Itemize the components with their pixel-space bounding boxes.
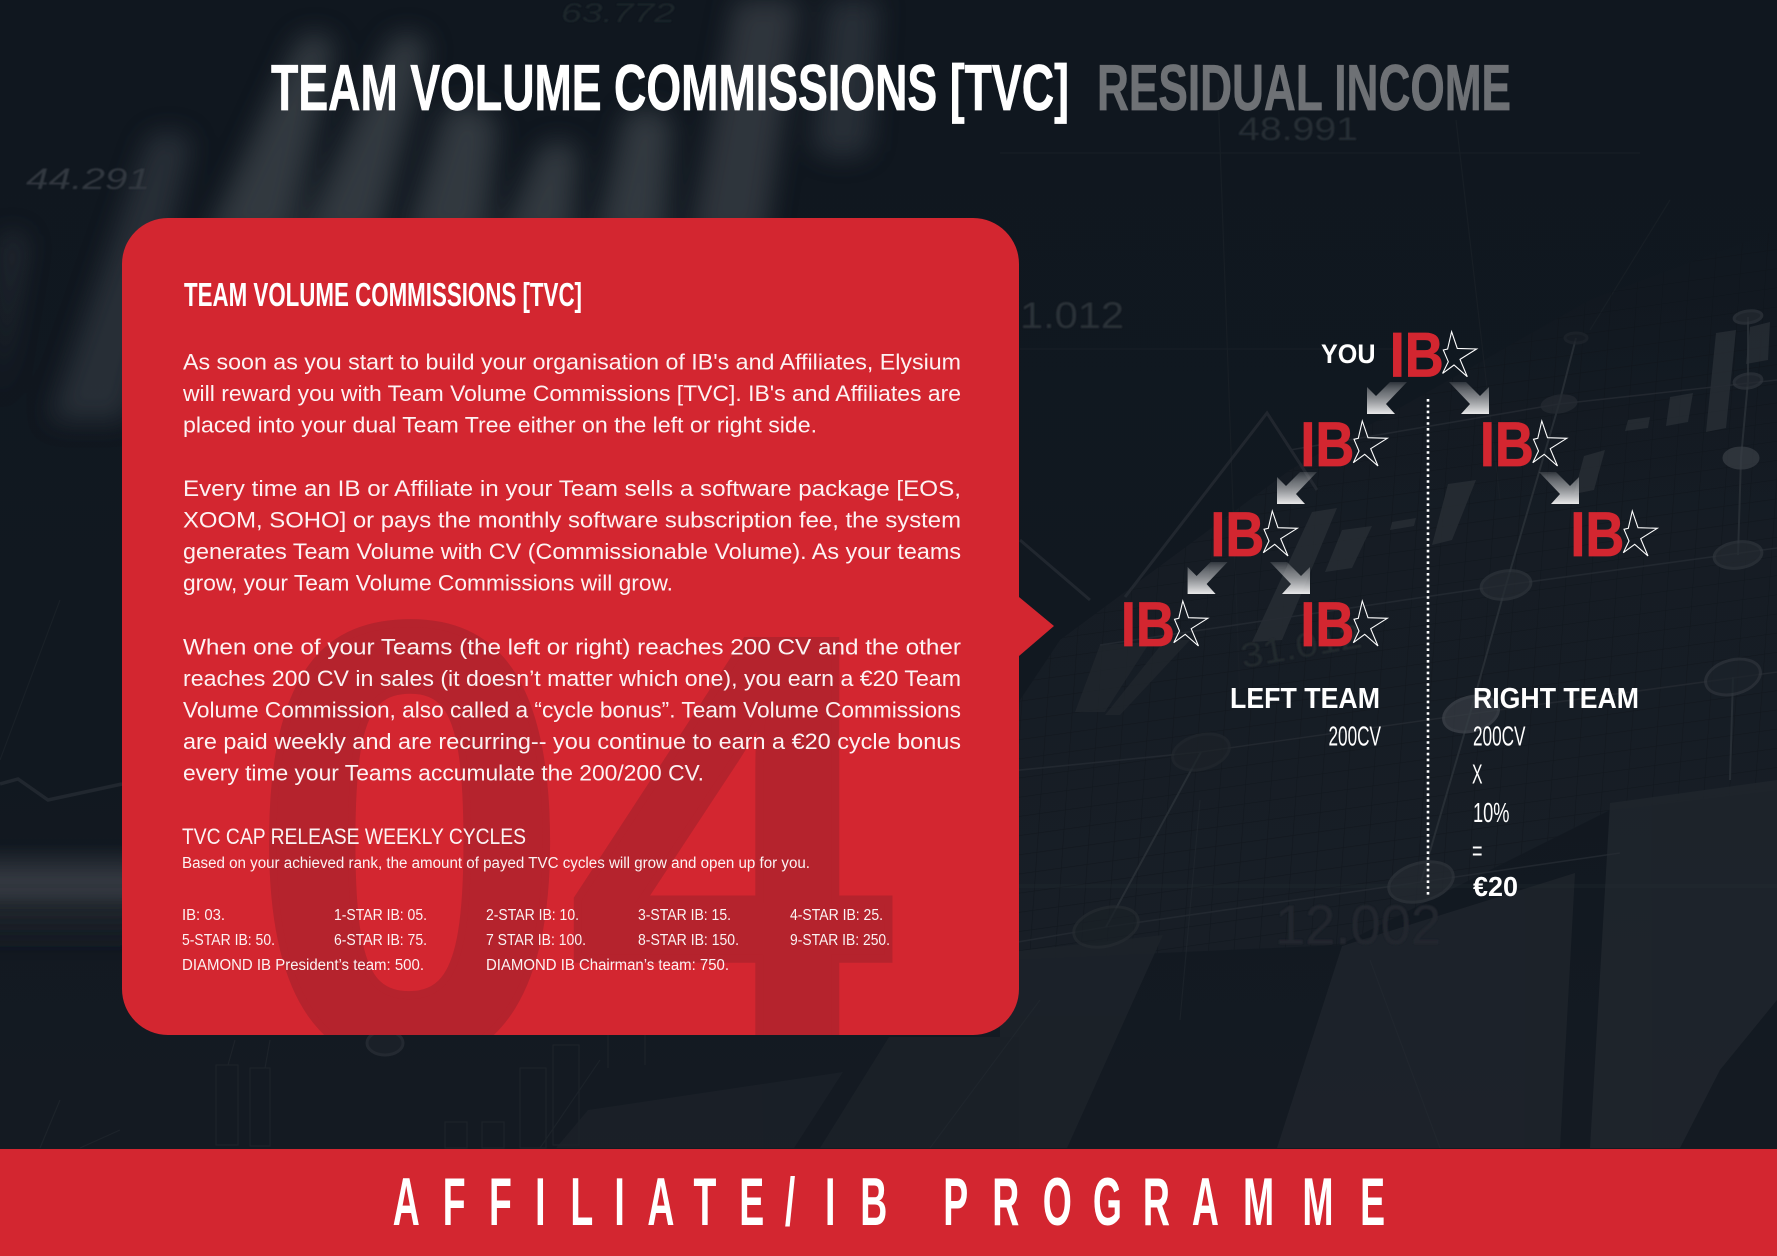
- rank cycle table: 9-STAR IB: 250.: [790, 932, 890, 949]
- big background shapes: [556, 780, 1777, 1148]
- panel heading: TEAM VOLUME COMMISSIONS [TVC]: [184, 276, 582, 313]
- paragraph 1: will reward you with Team Volume Commissions [TVC]. IB's and Affiliates are: [182, 381, 961, 406]
- rank cycle table: 1-STAR IB: 05.: [334, 907, 427, 924]
- rank cycle table: 7 STAR IB: 100.: [486, 932, 586, 949]
- node: left 3 inner: IB: [1300, 590, 1354, 660]
- right team label: RIGHT TEAM: [1473, 683, 1639, 715]
- right team calculation: 200CV: [1473, 720, 1526, 752]
- right team calculation: [1472, 720, 1526, 902]
- title: RESIDUAL INCOME: [1097, 51, 1511, 124]
- rank cycle table: 5-STAR IB: 50.: [182, 932, 275, 949]
- paragraph 2: Every time an IB or Affiliate in your Team sells a software package [EOS,: [183, 476, 961, 501]
- paragraph 1: As soon as you start to build your organisation of IB's and Affiliates, Elysium: [183, 350, 961, 374]
- rank cycle table: 3-STAR IB: 15.: [638, 907, 731, 924]
- paragraph 2: generates Team Volume with CV (Commissionable Volume). As your teams: [183, 539, 961, 564]
- paragraph 3: reaches 200 CV in sales (it doesn’t matter which one), you earn a €20 Team: [183, 666, 961, 691]
- faint grid lines: [1000, 90, 1670, 700]
- right team calculation: 10%: [1473, 797, 1510, 828]
- node: right 1: IB: [1480, 410, 1534, 480]
- rank cycle table: DIAMOND IB Chairman’s team: 750.: [486, 957, 729, 974]
- right team calculation: X: [1472, 758, 1483, 790]
- large section number: [269, 619, 892, 1035]
- node: left 3 outer: IB: [1121, 590, 1175, 660]
- faint numbers: 1.012: [1020, 295, 1124, 336]
- you label: YOU: [1321, 339, 1376, 369]
- paragraph 3: [183, 634, 962, 786]
- paragraph 2: grow, your Team Volume Commissions will grow.: [183, 570, 673, 596]
- panel: team volume commissions text: [122, 218, 1054, 1188]
- paragraph 2: [183, 476, 961, 596]
- node: left 2: IB: [1210, 500, 1264, 570]
- faint numbers: [26, 0, 1441, 956]
- faint numbers: 48.991: [1238, 111, 1358, 147]
- node: you: IB: [1390, 321, 1444, 391]
- candlestick blocks: [1075, 322, 1770, 715]
- cycles intro: Based on your achieved rank, the amount of payed TVC cycles will grow and open up for you.: [182, 855, 810, 872]
- paragraph 2: XOOM, SOHO] or pays the monthly software subscription fee, the system: [183, 508, 961, 532]
- arrow: you to right 1: [1449, 382, 1489, 414]
- large section number: 0: [250, 496, 570, 1188]
- rank cycle table: DIAMOND IB President’s team: 500.: [182, 957, 424, 974]
- paragraph 1: placed into your dual Team Tree either on the left or right side.: [183, 412, 817, 438]
- node: right 2: IB: [1570, 500, 1624, 570]
- paragraph 1: [182, 350, 961, 438]
- footer text: AFFILIATE/IB PROGRAMME: [393, 1163, 1385, 1240]
- rank cycle table: 8-STAR IB: 150.: [638, 932, 739, 949]
- candlesticks lower panel: [40, 1035, 645, 1148]
- paragraph 3: When one of your Teams (the left or right) reaches 200 CV and the other: [183, 634, 962, 660]
- chart rings: [367, 309, 1764, 1055]
- paragraph 3: are paid weekly and are recurring-- you continue to earn a €20 cycle bonus: [183, 729, 961, 754]
- left team label: LEFT TEAM: [1230, 683, 1380, 715]
- faint numbers: 31.012: [1238, 617, 1365, 676]
- paragraph 3: Volume Commission, also called a “cycle bonus”. Team Volume Commissions: [183, 698, 961, 722]
- arrow: left 1 to left 2: [1277, 472, 1317, 504]
- rank cycle table: 4-STAR IB: 25.: [790, 907, 883, 924]
- dotted divider: [1427, 399, 1429, 897]
- cycles subheading: TVC CAP RELEASE WEEKLY CYCLES: [182, 824, 526, 849]
- rank cycle table: 6-STAR IB: 75.: [334, 932, 427, 949]
- large section number: 4: [569, 515, 895, 1163]
- chart polylines: [0, 317, 1777, 1148]
- title: TEAM VOLUME COMMISSIONS [TVC]: [271, 51, 1069, 124]
- panel background with pointer: [122, 218, 1054, 1035]
- diagram: dual team tree: [1121, 321, 1657, 902]
- rank cycle table: [182, 907, 890, 974]
- faint numbers: 12.002: [1275, 893, 1441, 956]
- paragraph 3: every time your Teams accumulate the 200/200 CV.: [183, 760, 704, 786]
- arrow: left 2 to left 3 outer: [1188, 562, 1228, 594]
- rank cycle table: IB: 03.: [182, 907, 225, 924]
- arrow: right 1 to right 2: [1539, 472, 1579, 504]
- perspective mesh: [1000, 230, 1777, 960]
- arrow: left 2 to left 3 inner: [1270, 562, 1310, 594]
- faint numbers: 44.291: [26, 163, 150, 196]
- footer band: [0, 1149, 1777, 1256]
- right team calculation: =: [1472, 835, 1482, 866]
- arrow: you to left 1: [1367, 382, 1407, 414]
- rank cycle table: 2-STAR IB: 10.: [486, 907, 579, 924]
- left team volume: 200CV: [1328, 720, 1381, 752]
- node: left 1: IB: [1300, 410, 1354, 480]
- right team calculation: €20: [1473, 871, 1518, 902]
- left glow band: [0, 845, 130, 955]
